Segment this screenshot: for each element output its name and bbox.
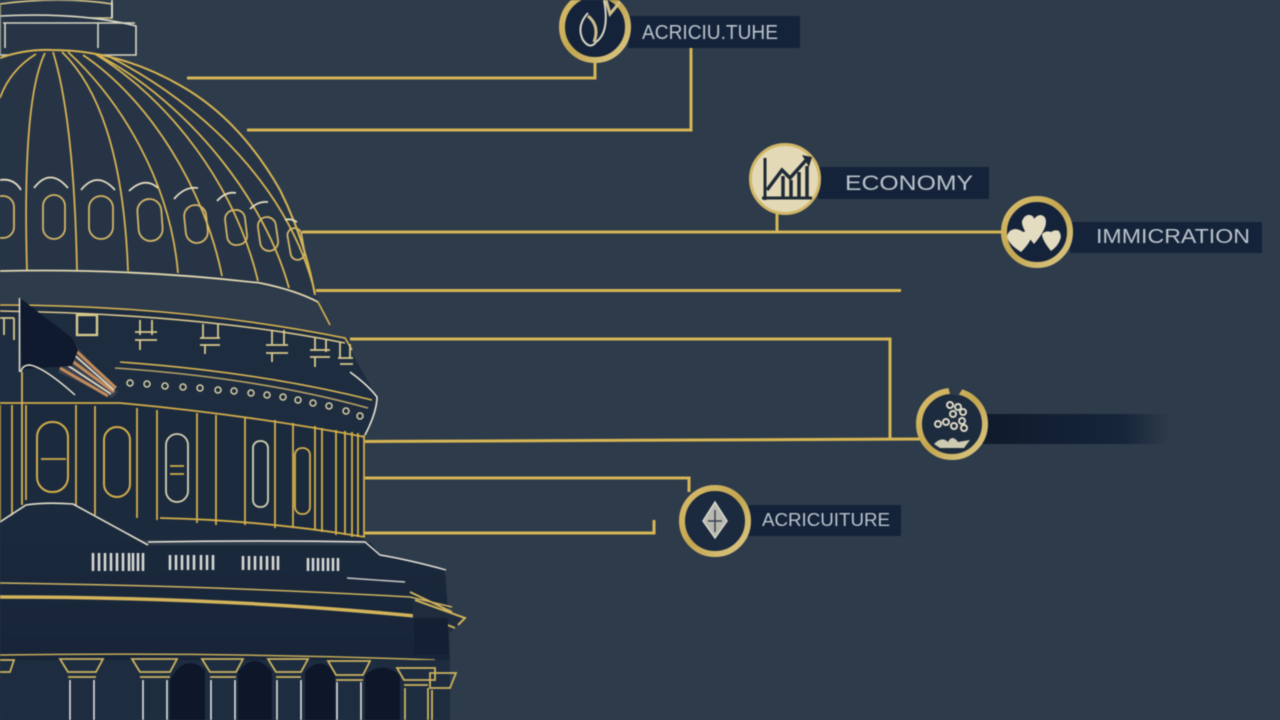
icon: rising bar chart (750, 144, 820, 214)
label text: ACRICUITURE (762, 510, 890, 530)
icon: leaf (562, 0, 628, 60)
label text: ACRICIU.TUHE (642, 22, 778, 44)
american flag (20, 298, 118, 505)
node: immigration (1004, 199, 1262, 265)
frieze ornaments (0, 315, 353, 367)
balustrade (93, 553, 338, 571)
dome windows (0, 178, 306, 261)
icon: diamond leaf (682, 488, 748, 554)
lower columns (0, 659, 456, 720)
label text: ECONOMY (845, 172, 973, 195)
label bar (1070, 222, 1262, 253)
lower drum colonnade (0, 403, 365, 540)
node: economy (750, 144, 989, 214)
label bar (748, 505, 901, 536)
upper drum (0, 302, 377, 437)
label bar (628, 16, 800, 48)
node: unlabelled (919, 386, 1170, 457)
label bar (818, 167, 989, 199)
portico base (0, 503, 465, 660)
connector lines (187, 48, 1005, 533)
node: bottom agriculture (682, 488, 901, 554)
icon: three hearts (1004, 199, 1070, 265)
dome (0, 50, 318, 302)
lantern (0, 0, 136, 55)
empty label bar (983, 414, 1170, 444)
icon: clustered dots (919, 386, 985, 457)
label text: IMMICRATION (1096, 226, 1250, 248)
capitol building illustration (0, 0, 465, 720)
node: top agriculture (562, 0, 800, 60)
drum dots (127, 380, 363, 419)
